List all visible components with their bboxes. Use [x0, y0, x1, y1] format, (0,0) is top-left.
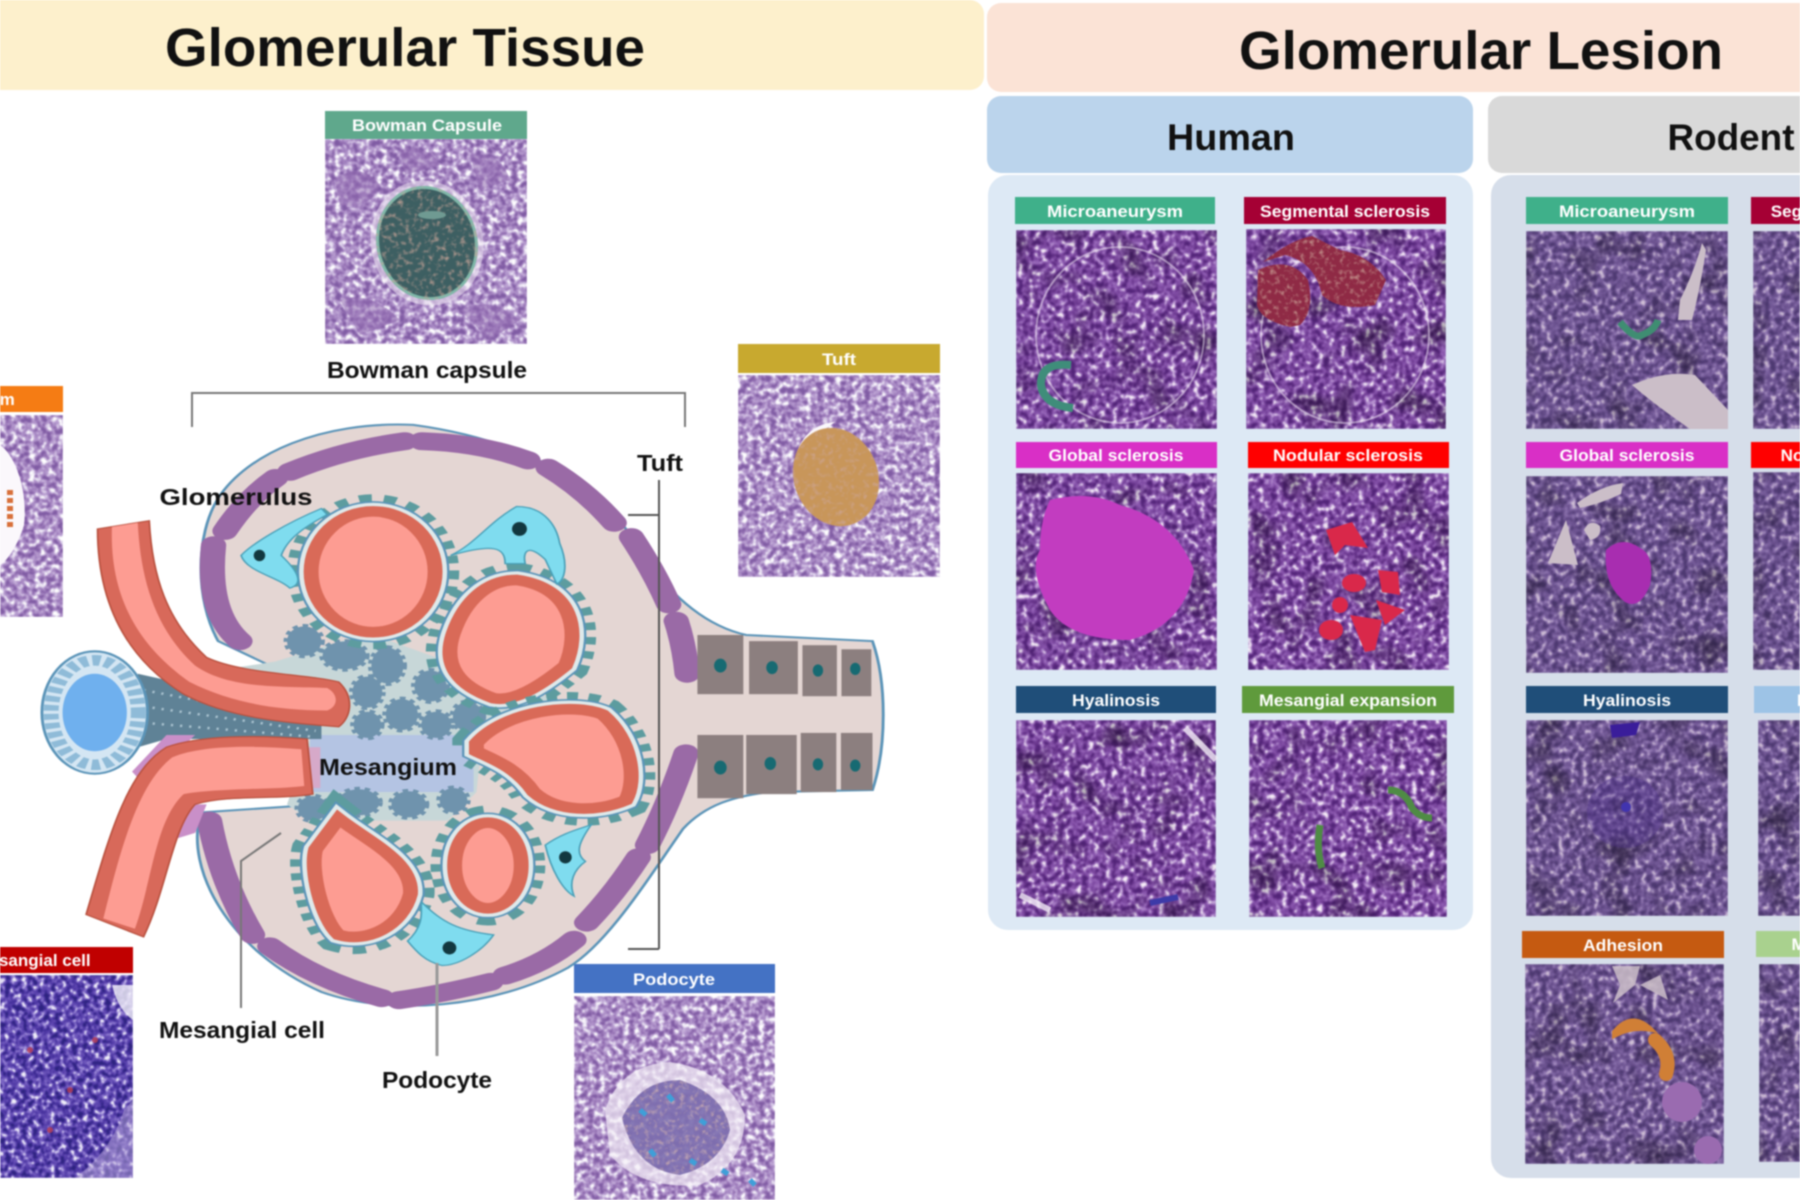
tile: Human Mesangial expansion: Mesangial expansion — [1259, 691, 1437, 710]
tile: Bowman Capsule: Bowman Capsule — [352, 116, 502, 135]
capillary loop 3 — [476, 709, 631, 809]
podocyte nuclei — [254, 522, 572, 954]
tile: Rodent Adhesion: Adhesion — [1583, 936, 1663, 955]
tile: Mesangial cell (cropped at left edge) — [0, 947, 133, 1178]
tile: Human Microaneurysm — [1015, 197, 1217, 429]
label: Tuft: Tuft — [637, 450, 683, 476]
tile: Tuft — [738, 344, 940, 577]
label: Mesangium: Mesangium — [319, 754, 457, 780]
tile: Tuft: Tuft — [822, 350, 856, 369]
tile: Human Global sclerosis: Global sclerosis — [1048, 446, 1184, 465]
capillary loop 5 — [455, 823, 521, 908]
tile: Human Nodular sclerosis — [1248, 442, 1449, 670]
panel: Rodent lesions — [1491, 175, 1800, 1178]
heading banner: Glomerular Lesion — [987, 3, 1800, 92]
podocytes — [241, 506, 591, 965]
tile: Human Segmental sclerosis: Segmental sclerosis — [1260, 202, 1430, 221]
mesangium patch — [310, 735, 474, 792]
tile: Human Microaneurysm: Microaneurysm — [1047, 202, 1183, 221]
label: Glomerulus: Glomerulus — [160, 484, 312, 510]
header: Rodent: Rodent — [1668, 117, 1794, 158]
heading banner: Glomerular Lesion: Glomerular Lesion — [1239, 21, 1723, 81]
tile: Rodent Adhesion — [1522, 931, 1724, 1164]
label: Podocyte: Podocyte — [382, 1067, 492, 1093]
tile: Rodent Nodular sclerosis — [1751, 442, 1800, 670]
bowman capsule body — [197, 425, 883, 1006]
tile: Podocyte: Podocyte — [633, 970, 715, 989]
header: Human — [987, 96, 1473, 173]
label: Bowman capsule: Bowman capsule — [327, 357, 527, 383]
tile: Rodent Microaneurysm — [1526, 197, 1728, 429]
tile: Human Mesangial expansion — [1242, 686, 1454, 917]
tile: Rodent Hyalinosis — [1526, 686, 1728, 916]
capillary loop 1 — [311, 511, 435, 632]
tile: Mesangium (cropped at left edge) — [0, 386, 63, 617]
header: Human: Human — [1167, 117, 1295, 158]
afferent arteriole — [86, 737, 313, 937]
proximal tubule cells — [697, 635, 872, 798]
diagram: glomerulus schematic — [42, 425, 883, 1006]
tile: Rodent Global sclerosis — [1526, 442, 1728, 673]
leader: Mesangial cell — [241, 833, 281, 1008]
bracket: Bowman capsule — [192, 393, 685, 427]
mesangial cells — [287, 626, 483, 821]
tile: Rodent Mesangial expansion — [1756, 931, 1800, 1162]
header: Rodent — [1488, 96, 1800, 173]
capillary loop 4 — [314, 819, 411, 937]
tile: Human Segmental sclerosis — [1244, 197, 1446, 429]
heading banner: Glomerular Tissue: Glomerular Tissue — [165, 18, 645, 78]
tile: Rodent Mesangiolysis — [1754, 686, 1800, 916]
tile: Rodent Segmental sclerosis — [1751, 197, 1800, 429]
tile: Human Global sclerosis — [1016, 442, 1217, 670]
tubule nuclei — [714, 659, 860, 775]
label: Mesangial cell: Mesangial cell — [159, 1017, 325, 1043]
juxtaglomerular region — [138, 674, 321, 747]
parietal epithelial cells — [210, 441, 687, 1000]
tile: Human Hyalinosis — [1016, 686, 1216, 917]
mesangial matrix — [144, 633, 551, 821]
tile: Human Nodular sclerosis: Nodular sclerosis — [1273, 446, 1423, 465]
efferent arteriole — [98, 521, 350, 727]
bracket: Tuft — [628, 480, 659, 949]
tile: Podocyte — [574, 964, 775, 1200]
tile: Rodent Microaneurysm: Microaneurysm — [1559, 202, 1695, 221]
tile: Human Hyalinosis: Hyalinosis — [1072, 691, 1160, 710]
tile: Rodent Hyalinosis: Hyalinosis — [1583, 691, 1671, 710]
tile: Bowman Capsule — [325, 111, 527, 344]
leader: Podocyte — [436, 963, 438, 1056]
capillary loop 2 — [450, 580, 572, 699]
macula densa — [42, 651, 148, 774]
panel: Human lesions — [988, 175, 1473, 930]
tile: Rodent Global sclerosis: Global sclerosis — [1560, 446, 1694, 465]
heading banner: Glomerular Tissue — [0, 0, 984, 90]
